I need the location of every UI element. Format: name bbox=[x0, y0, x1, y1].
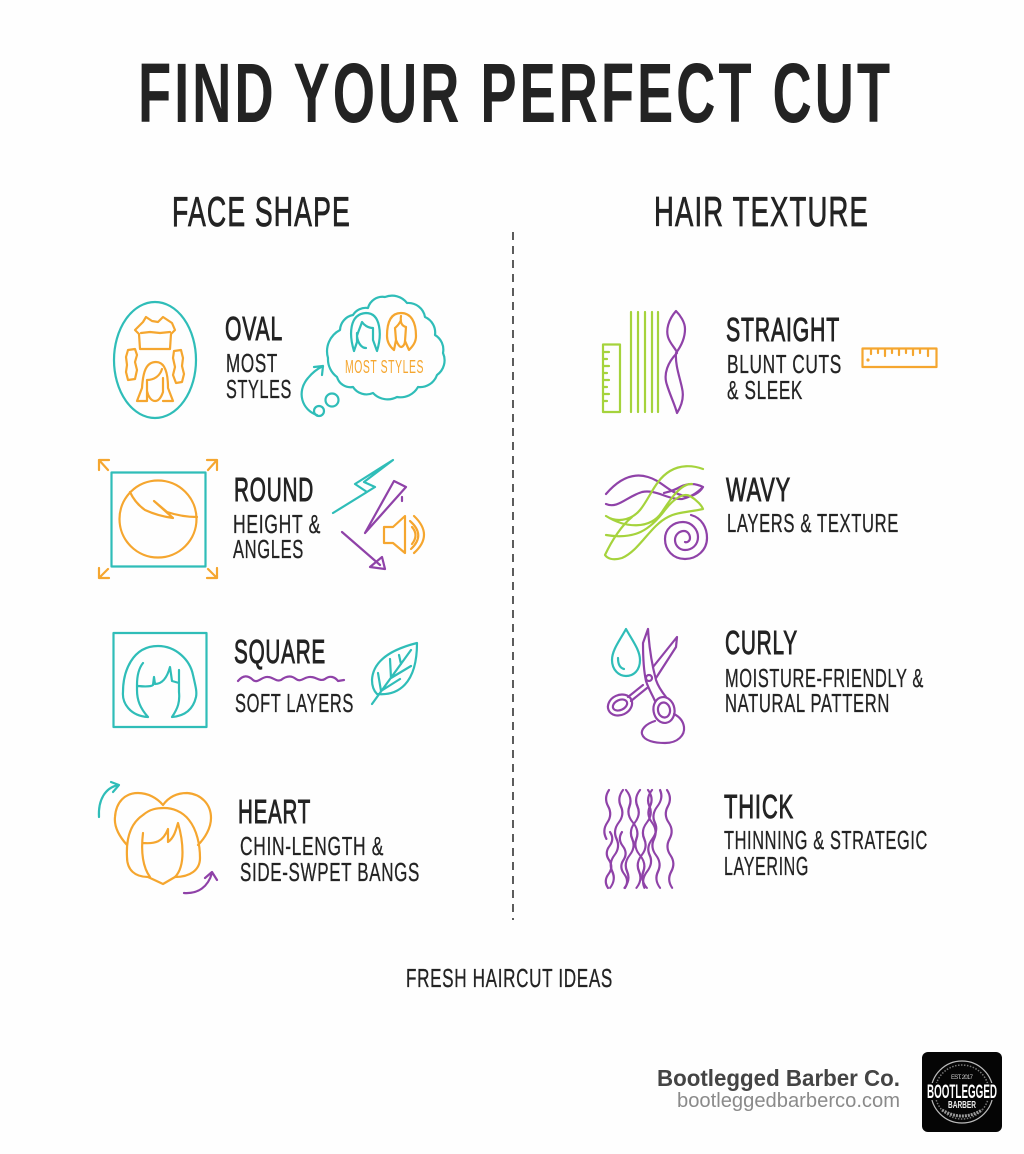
text: straight bbox=[726, 311, 842, 405]
logo badge: EST. 2017 bbox=[951, 1075, 974, 1081]
row: round bbox=[99, 460, 424, 578]
row: square bbox=[114, 633, 417, 727]
panel: face shape bbox=[99, 188, 445, 893]
center dashed divider bbox=[512, 232, 514, 920]
icon: scissors bbox=[604, 629, 684, 743]
text: wavy: LAYERS & TEXTURE bbox=[727, 508, 899, 538]
text: thick: LAYERING bbox=[724, 851, 809, 881]
text: straight: & SLEEK bbox=[727, 375, 803, 405]
brand name: Bootlegged Barber Co. bbox=[657, 1065, 900, 1091]
icon: angles, lightning and speaker bbox=[333, 460, 424, 569]
icon: water drop bbox=[612, 629, 640, 676]
row: curly bbox=[604, 624, 924, 743]
text: round: ANGLES bbox=[233, 534, 304, 564]
icon: heart face bbox=[99, 782, 217, 893]
icon: round face in square bbox=[99, 460, 217, 578]
text: square bbox=[234, 633, 354, 718]
icon: thought bubble most styles: MOST STYLES bbox=[345, 357, 424, 377]
brand url: bootleggedbarberco.com bbox=[677, 1090, 900, 1112]
panel: hair texture bbox=[603, 188, 936, 888]
icon: orange ruler bbox=[862, 348, 936, 367]
heading: face shape: FACE SHAPE bbox=[172, 188, 351, 235]
text: oval: STYLES bbox=[226, 374, 292, 404]
text: curly: CURLY bbox=[725, 624, 798, 661]
text: heart bbox=[238, 793, 420, 887]
text: straight: BLUNT CUTS bbox=[727, 349, 842, 379]
text: straight: STRAIGHT bbox=[726, 311, 840, 348]
icon: straight hair and ruler bbox=[603, 311, 685, 413]
text: heart: CHIN-LENGTH & bbox=[240, 831, 384, 861]
footer branding bbox=[657, 1052, 1002, 1132]
icon: wavy line bbox=[238, 676, 344, 681]
text: curly bbox=[725, 624, 924, 718]
heading: hair texture: HAIR TEXTURE bbox=[654, 188, 869, 235]
text: curly: NATURAL PATTERN bbox=[725, 688, 890, 718]
icon: leaf bbox=[372, 643, 417, 704]
logo badge: BARBER bbox=[948, 1100, 977, 1111]
text: thick: THICK bbox=[724, 788, 794, 825]
text: heart: SIDE-SWPET BANGS bbox=[240, 857, 420, 887]
text: wavy bbox=[726, 471, 899, 538]
text: oval: OVAL bbox=[225, 310, 283, 347]
text: square: SOFT LAYERS bbox=[235, 688, 354, 718]
text: thick bbox=[724, 788, 928, 881]
text: wavy: WAVY bbox=[726, 471, 791, 508]
text: round: ROUND bbox=[234, 471, 314, 508]
text: heart: HEART bbox=[238, 793, 311, 830]
row: oval bbox=[114, 296, 445, 418]
icon: thick wavy hair bbox=[604, 790, 675, 888]
row: thick bbox=[604, 788, 928, 888]
logo badge bbox=[922, 1052, 1002, 1132]
row: straight bbox=[603, 311, 936, 413]
text: oval bbox=[225, 310, 292, 404]
icon: oval face with hairstyles bbox=[114, 302, 196, 418]
text: oval: MOST bbox=[226, 348, 278, 378]
row: wavy bbox=[605, 466, 899, 559]
row: heart bbox=[99, 782, 420, 893]
text: square: SQUARE bbox=[234, 633, 326, 670]
text: round: HEIGHT & bbox=[233, 509, 321, 539]
text: round bbox=[233, 471, 321, 564]
icon: wavy hair and spiral bbox=[605, 466, 707, 559]
icon: thought bubble most styles bbox=[302, 296, 445, 416]
icon: square face with bob bbox=[114, 633, 206, 727]
caption: FRESH HAIRCUT IDEAS bbox=[406, 963, 613, 993]
